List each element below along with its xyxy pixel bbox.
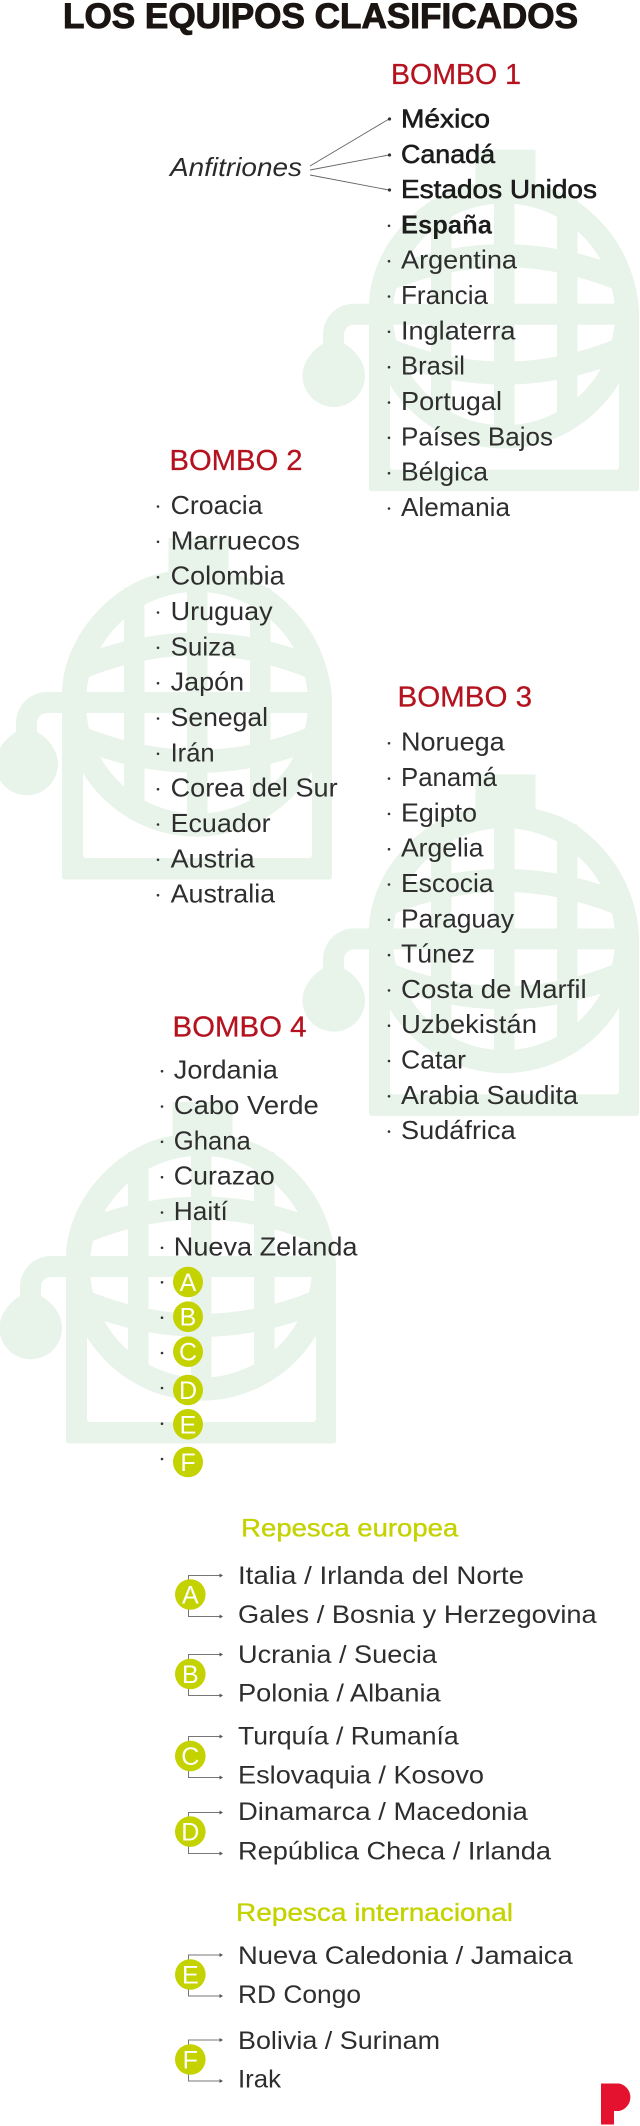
heading: repesca europea: Repesca europea	[241, 1514, 458, 1542]
list: bombo 1 teams: Francia	[401, 280, 489, 310]
icon: lottery drum bombo 3	[302, 774, 639, 1116]
playoff group A: Gales / Bosnia y Herzegovina	[238, 1601, 597, 1629]
playoff group D: Dinamarca / Macedonia	[238, 1798, 528, 1826]
playoff badges A to F: C	[179, 1339, 197, 1367]
heading: bombo 2: BOMBO 2	[170, 445, 302, 477]
icon: red P logo	[601, 2084, 630, 2124]
playoff badges A to F	[161, 1267, 203, 1477]
list: bombo 2 teams: Croacia	[171, 490, 263, 520]
playoff group A	[175, 1562, 597, 1629]
playoff group D: República Checa / Irlanda	[238, 1838, 551, 1866]
playoff badges A to F: B	[180, 1304, 196, 1332]
list: bombo 1 teams: España	[401, 209, 493, 239]
list: bombo 3 teams: Paraguay	[401, 903, 514, 933]
icon: lottery drum bombo 4	[0, 1102, 336, 1444]
panel: repesca europea	[175, 1514, 597, 1866]
playoff badges A to F: E	[180, 1411, 196, 1439]
list: bombo 3 teams: Túnez	[401, 939, 475, 969]
list: bombo 4 teams: Ghana	[174, 1125, 251, 1155]
playoff group E: Nueva Caledonia / Jamaica	[238, 1942, 573, 1970]
panel: bombo 1	[168, 59, 597, 522]
list: bombo 2 teams: Senegal	[171, 702, 268, 732]
list: bombo 3 teams: Costa de Marfil	[401, 974, 587, 1004]
panel: bombo 2	[157, 445, 338, 909]
playoff group C: C	[181, 1743, 199, 1771]
list: bombo 1 teams	[388, 104, 597, 522]
list: bombo 1 teams: Argentina	[401, 245, 518, 275]
list: bombo 2 teams: Suiza	[171, 631, 236, 661]
list: bombo 1 teams: México	[401, 104, 490, 134]
playoff group C	[175, 1722, 484, 1790]
list: bombo 1 teams: Alemania	[401, 492, 511, 522]
playoff group B: Polonia / Albania	[238, 1680, 441, 1708]
playoff group E	[175, 1942, 573, 2009]
list: bombo 2 teams: Uruguay	[171, 596, 273, 626]
icon: lottery drum bombo 2	[0, 538, 332, 880]
list: bombo 1 teams: Portugal	[401, 386, 502, 416]
list: bombo 2 teams: Corea del Sur	[171, 773, 338, 803]
list: bombo 1 teams: Canadá	[401, 139, 496, 169]
list: bombo 3 teams: Escocia	[401, 868, 494, 898]
list: bombo 2 teams: Colombia	[171, 561, 285, 591]
playoff group C: Turquía / Rumanía	[238, 1722, 459, 1750]
playoff group B: B	[182, 1661, 199, 1689]
list: bombo 1 teams: Brasil	[401, 351, 465, 381]
list: bombo 4 teams: Cabo Verde	[174, 1090, 319, 1120]
playoff badges A to F: A	[180, 1269, 197, 1297]
playoff group A: Italia / Irlanda del Norte	[238, 1562, 524, 1590]
list: bombo 2 teams: Marruecos	[171, 525, 300, 555]
playoff group F	[175, 2027, 440, 2093]
list: bombo 3 teams: Uzbekistán	[401, 1009, 537, 1039]
list: bombo 2 teams: Ecuador	[171, 808, 271, 838]
list: bombo 3 teams: Catar	[401, 1044, 466, 1074]
list: bombo 1 teams: Estados Unidos	[401, 174, 597, 204]
playoff group D: D	[181, 1819, 199, 1847]
list: bombo 3 teams: Sudáfrica	[401, 1115, 516, 1145]
playoff group F: Bolivia / Surinam	[238, 2027, 440, 2055]
playoff group F: Irak	[238, 2065, 282, 2093]
icon: lottery drum bombo 1	[302, 150, 639, 491]
list: bombo 4 teams: Jordania	[174, 1055, 278, 1085]
playoff group F: F	[183, 2046, 198, 2074]
playoff badges A to F: F	[180, 1449, 196, 1477]
list: bombo 3 teams: Arabia Saudita	[401, 1080, 579, 1110]
list: bombo 1 teams: Bélgica	[401, 457, 489, 487]
list: bombo 4 teams: Nueva Zelanda	[174, 1231, 358, 1261]
list: bombo 2 teams: Australia	[171, 879, 276, 909]
panel: repesca internacional	[175, 1899, 573, 2093]
list: bombo 2 teams	[157, 490, 338, 909]
list: bombo 3 teams: Argelia	[401, 833, 484, 863]
heading: bombo 4: BOMBO 4	[172, 1012, 307, 1044]
list: bombo 4 teams	[161, 1055, 358, 1261]
panel: bombo 4	[161, 1012, 358, 1477]
list: bombo 3 teams: Panamá	[401, 762, 498, 792]
panel: bombo 3	[388, 682, 587, 1145]
list: bombo 4 teams: Curazao	[174, 1161, 275, 1191]
callout: anfitriones	[168, 117, 391, 192]
list: bombo 3 teams: Egipto	[401, 797, 477, 827]
heading: bombo 3: BOMBO 3	[398, 682, 532, 714]
list: bombo 4 teams: Haití	[174, 1196, 229, 1226]
list: bombo 2 teams: Irán	[171, 737, 215, 767]
playoff group C: Eslovaquia / Kosovo	[238, 1762, 484, 1790]
playoff group A: A	[182, 1582, 199, 1610]
playoff group B: Ucrania / Suecia	[238, 1641, 437, 1669]
playoff group E: RD Congo	[238, 1981, 361, 2009]
list: bombo 3 teams: Noruega	[401, 727, 505, 757]
list: bombo 2 teams: Austria	[171, 843, 255, 873]
heading: bombo 1: BOMBO 1	[391, 59, 521, 91]
callout: anfitriones: Anfitriones	[168, 152, 302, 182]
heading: repesca internacional: Repesca internacional	[236, 1899, 513, 1927]
playoff group B	[175, 1641, 441, 1708]
playoff group E: E	[182, 1962, 199, 1990]
list: bombo 1 teams: Países Bajos	[401, 421, 553, 451]
list: bombo 2 teams: Japón	[171, 667, 244, 697]
playoff group D	[175, 1798, 551, 1866]
playoff badges A to F: D	[179, 1377, 197, 1405]
list: bombo 3 teams	[388, 727, 587, 1145]
list: bombo 1 teams: Inglaterra	[401, 315, 516, 345]
